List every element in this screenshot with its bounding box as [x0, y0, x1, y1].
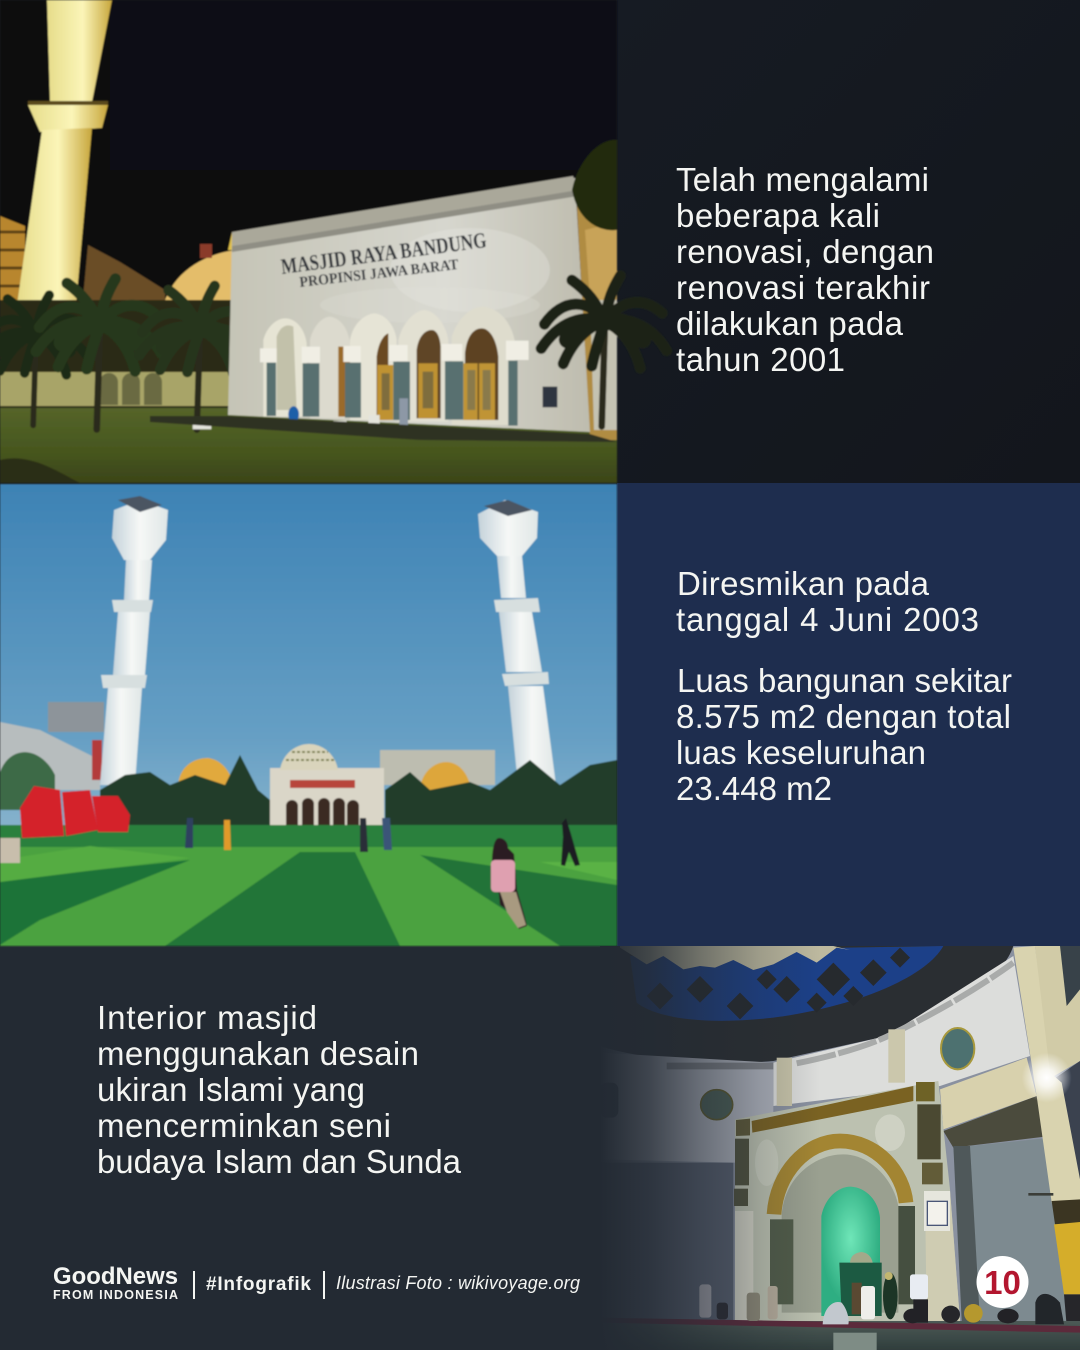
text block: interior design: ukiran Islami yang: [97, 1071, 365, 1108]
text block: renovation: tahun 2001: [676, 341, 845, 378]
panel: middle right navy background: [617, 483, 1080, 946]
page number badge: [976, 1256, 1028, 1308]
logo: GoodNews from Indonesia: FROM INDONESIA: [53, 1288, 178, 1302]
mihrab wall: [734, 1081, 960, 1321]
panel: top right dark background: [617, 0, 1080, 483]
text block: interior design: Interior masjid: [97, 999, 317, 1036]
arches: [193, 307, 557, 433]
hashtag: #Infografik: [206, 1274, 311, 1295]
page number badge: 10: [984, 1264, 1021, 1301]
text block: renovation: [676, 161, 934, 378]
text block: building area: 8.575 m2 dengan total: [676, 698, 1011, 735]
right side structure: [940, 946, 1080, 1326]
trees: [100, 755, 617, 825]
background buildings left: [0, 702, 104, 810]
visitors: [185, 818, 580, 929]
left minaret: [100, 496, 168, 785]
photo: mosque courtyard in daylight: [0, 484, 617, 946]
photo: mosque interior with mihrab: [600, 946, 1080, 1350]
text block: interior design: [97, 999, 462, 1180]
lawn: [0, 405, 617, 483]
panel: bottom dark background: [0, 946, 1080, 1350]
text block: inauguration date: [676, 565, 979, 638]
right minaret: [478, 500, 556, 785]
central mosque: [270, 744, 384, 826]
photo: mosque exterior at night: [0, 0, 667, 483]
building facade: MASJID RAYA BANDUNG: [279, 227, 488, 279]
text block: renovation: dilakukan pada: [676, 305, 904, 342]
lawn with mowing stripes: [0, 825, 617, 946]
text block: renovation: renovasi, dengan: [676, 233, 934, 270]
text block: renovation: renovasi terakhir: [676, 269, 930, 306]
text block: interior design: budaya Islam dan Sunda: [97, 1143, 462, 1180]
text block: inauguration date: tanggal 4 Juni 2003: [676, 601, 979, 638]
text block: building area: luas keseluruhan: [676, 734, 926, 771]
dome ceiling: [600, 946, 1013, 1063]
text block: building area: 23.448 m2: [676, 770, 832, 807]
logo: GoodNews from Indonesia: GoodNews: [53, 1263, 178, 1290]
fade overlay blending interior photo into dark panel: [600, 946, 1080, 1350]
logo: GoodNews from Indonesia: [53, 1263, 178, 1302]
text block: interior design: mencerminkan seni: [97, 1107, 391, 1144]
text block: building area: [676, 662, 1012, 807]
footer: logo, hashtag and photo credit: [53, 1263, 580, 1302]
building facade: [193, 176, 590, 433]
text block: renovation: beberapa kali: [676, 197, 880, 234]
worshippers: [699, 1274, 1064, 1324]
upper wall: [773, 956, 1030, 1106]
text block: interior design: menggunakan desain: [97, 1035, 419, 1072]
building facade: PROPINSI JAWA BARAT: [299, 257, 459, 291]
floor and carpet: [600, 1318, 1080, 1350]
text block: inauguration date: Diresmikan pada: [677, 565, 930, 602]
text block: building area: Luas bangunan sekitar: [677, 662, 1012, 699]
minaret: [17, 0, 112, 305]
text block: renovation: Telah mengalami: [676, 161, 929, 198]
red city sign: [0, 786, 130, 863]
photo credit: Ilustrasi Foto : wikivoyage.org: [336, 1273, 580, 1293]
